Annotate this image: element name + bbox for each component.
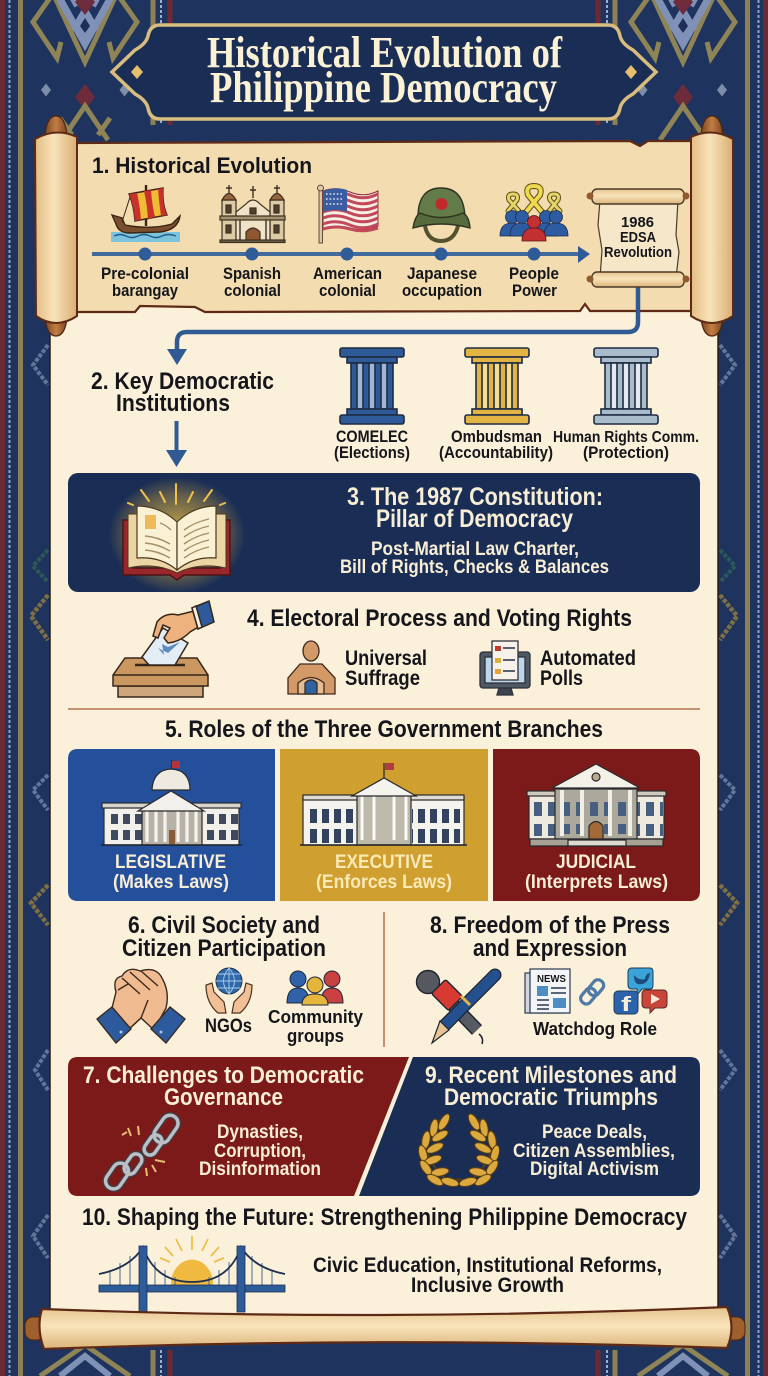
panel: legislative xyxy=(68,749,275,901)
icon: glowing open book xyxy=(109,477,245,593)
icon: social media badges: f xyxy=(621,994,631,1016)
icon: clasped hands xyxy=(97,969,185,1043)
pillar: Human Rights Commission xyxy=(594,348,658,424)
panel 3 text: Pillar of Democracy xyxy=(376,505,573,533)
heading 4: 4. Electoral Process and Voting Rights xyxy=(247,605,632,632)
icon: people power ribbons and crowd xyxy=(500,186,568,241)
pillar: COMELEC xyxy=(340,348,404,424)
label: judicial xyxy=(525,852,668,893)
pillar labels: (Protection) xyxy=(583,443,669,462)
main parchment panel xyxy=(50,300,718,1315)
heading 8: 8. Freedom of the Press xyxy=(430,912,670,939)
icon: newspaper xyxy=(525,969,570,1013)
timeline labels: occupation xyxy=(402,281,482,300)
label: community groups: groups xyxy=(287,1026,344,1046)
icon: executive building xyxy=(300,763,467,845)
icon: chain link xyxy=(579,978,606,1006)
label: legislative xyxy=(113,852,229,893)
heading 8 xyxy=(430,912,670,962)
icon: microphone and pen xyxy=(416,970,495,1044)
panel 9 text xyxy=(513,1122,675,1180)
pillar labels: (Accountability) xyxy=(439,443,553,462)
bottom scroll roller xyxy=(25,1307,745,1349)
section 8: freedom of the press xyxy=(416,912,670,1044)
label: judicial: (Interprets Laws) xyxy=(525,872,668,893)
label: universal suffrage: Suffrage xyxy=(345,667,420,690)
pillar: Ombudsman xyxy=(465,348,529,424)
icon: bridge and sun xyxy=(99,1236,285,1312)
panel 3 text: 3. The 1987 Constitution: xyxy=(347,483,603,511)
top scroll panel xyxy=(35,116,733,365)
1986 EDSA scroll: 1986 xyxy=(621,214,654,231)
panel 9 text: Digital Activism xyxy=(530,1159,659,1180)
label: community groups xyxy=(268,1007,363,1046)
panel 3 text xyxy=(340,483,609,578)
section 6: civil society xyxy=(97,912,363,1046)
1986 EDSA scroll: Revolution xyxy=(604,244,672,261)
label: automated polls: Automated xyxy=(540,647,636,670)
heading 8: and Expression xyxy=(473,935,627,962)
heading 2: 2. Key Democratic xyxy=(91,368,274,395)
section 4: electoral process xyxy=(113,601,636,697)
title text: Historical Evolution of xyxy=(207,28,563,77)
timeline arrow with nodes xyxy=(92,246,590,263)
title text xyxy=(207,28,563,112)
icon: broken chain xyxy=(102,1112,181,1192)
heading 9 xyxy=(425,1062,677,1111)
panel: judicial xyxy=(493,749,700,901)
1986 EDSA scroll xyxy=(586,189,690,287)
section 10 text: Inclusive Growth xyxy=(411,1274,564,1297)
timeline labels: barangay xyxy=(112,281,178,300)
left roller xyxy=(35,116,77,336)
timeline labels: Pre-colonial xyxy=(101,264,189,283)
label: executive: (Enforces Laws) xyxy=(316,872,452,893)
icon: American flag xyxy=(318,185,378,243)
label: executive xyxy=(316,852,452,893)
icon: laurel wreath xyxy=(417,1112,501,1188)
label: community groups: Community xyxy=(268,1007,363,1027)
heading 2: Institutions xyxy=(116,390,230,417)
icon: Japanese helmet xyxy=(413,188,470,241)
heading 6: 6. Civil Society and xyxy=(128,912,320,939)
section 10: shaping the future xyxy=(82,1204,688,1312)
pillar labels: (Elections) xyxy=(334,443,410,462)
section 2: key democratic institutions xyxy=(91,348,699,467)
timeline labels: colonial xyxy=(224,281,281,300)
connector arrow from 1986 scroll to section 2 xyxy=(167,285,638,365)
section 5: three branches xyxy=(68,716,700,901)
heading 7 xyxy=(83,1062,364,1111)
heading 10: 10. Shaping the Future: Strengthening Philippine Democracy xyxy=(82,1204,688,1231)
right roller xyxy=(691,116,733,336)
panel: executive xyxy=(280,749,488,901)
icon: universal suffrage xyxy=(288,641,335,694)
pillar labels: Human Rights Comm. xyxy=(553,429,699,446)
heading 6: Citizen Participation xyxy=(122,935,326,962)
icon: newspaper: NEWS xyxy=(537,974,566,985)
icon: NGO globe in hands xyxy=(206,968,252,1013)
title banner xyxy=(112,25,656,119)
panel 9 text: Peace Deals, xyxy=(542,1122,647,1143)
icon: ballot box with hand xyxy=(113,601,214,697)
label: legislative: LEGISLATIVE xyxy=(115,852,226,873)
icon: community group xyxy=(287,971,343,1005)
label: automated polls xyxy=(540,647,636,690)
label: universal suffrage: Universal xyxy=(345,647,427,670)
pillar labels: Ombudsman xyxy=(451,427,542,446)
icon: boat xyxy=(111,185,180,242)
panel 7 text xyxy=(199,1122,321,1180)
timeline labels: Power xyxy=(512,281,557,300)
pillar labels: COMELEC xyxy=(336,427,408,446)
panel 3 text: Bill of Rights, Checks & Balances xyxy=(340,557,609,578)
heading 7: Governance xyxy=(164,1084,283,1111)
label: universal suffrage xyxy=(345,647,427,690)
label: executive: EXECUTIVE xyxy=(335,852,433,873)
pillar labels xyxy=(334,427,699,462)
timeline labels: Japanese xyxy=(407,264,477,283)
heading 1: 1. Historical Evolution xyxy=(92,153,312,178)
label: legislative: (Makes Laws) xyxy=(113,872,229,893)
heading 9: 9. Recent Milestones and xyxy=(425,1062,677,1089)
timeline labels: Spanish xyxy=(223,264,281,283)
icon: social media badges xyxy=(614,968,667,1016)
heading 7: 7. Challenges to Democratic xyxy=(83,1062,364,1089)
heading 9: Democratic Triumphs xyxy=(444,1084,658,1111)
label: automated polls: Polls xyxy=(540,667,583,690)
section 10 text xyxy=(313,1254,662,1297)
panel 9 text: Citizen Assemblies, xyxy=(513,1141,675,1162)
heading 6 xyxy=(122,912,326,962)
icon: automated polls monitor xyxy=(480,641,530,695)
1986 EDSA scroll: EDSA xyxy=(620,229,656,246)
panel 7 text: Corruption, xyxy=(214,1141,306,1162)
icon: judicial building xyxy=(527,764,666,846)
heading 5: 5. Roles of the Three Government Branches xyxy=(165,716,603,743)
heading 2 xyxy=(91,368,274,417)
label: NGOs: NGOs xyxy=(205,1016,252,1037)
section 10 text: Civic Education, Institutional Reforms, xyxy=(313,1254,662,1277)
title text: Philippine Democracy xyxy=(210,63,557,112)
panel 9: milestones xyxy=(359,1057,700,1196)
label: judicial: JUDICIAL xyxy=(556,852,636,873)
icon: legislative building xyxy=(101,760,242,845)
panel 7: challenges xyxy=(68,1057,409,1196)
panel 7 text: Disinformation xyxy=(199,1159,321,1180)
timeline labels: People xyxy=(509,264,559,283)
timeline labels xyxy=(101,264,559,300)
icon: Spanish church xyxy=(220,185,285,242)
panel 7 text: Dynasties, xyxy=(217,1122,303,1143)
timeline labels: colonial xyxy=(319,281,376,300)
label: watchdog role: Watchdog Role xyxy=(533,1019,657,1039)
panel 3: the 1987 Constitution xyxy=(68,473,700,593)
timeline labels: American xyxy=(313,264,382,283)
panel 3 text: Post-Martial Law Charter, xyxy=(371,539,579,560)
arrow to section 3 xyxy=(166,421,187,467)
